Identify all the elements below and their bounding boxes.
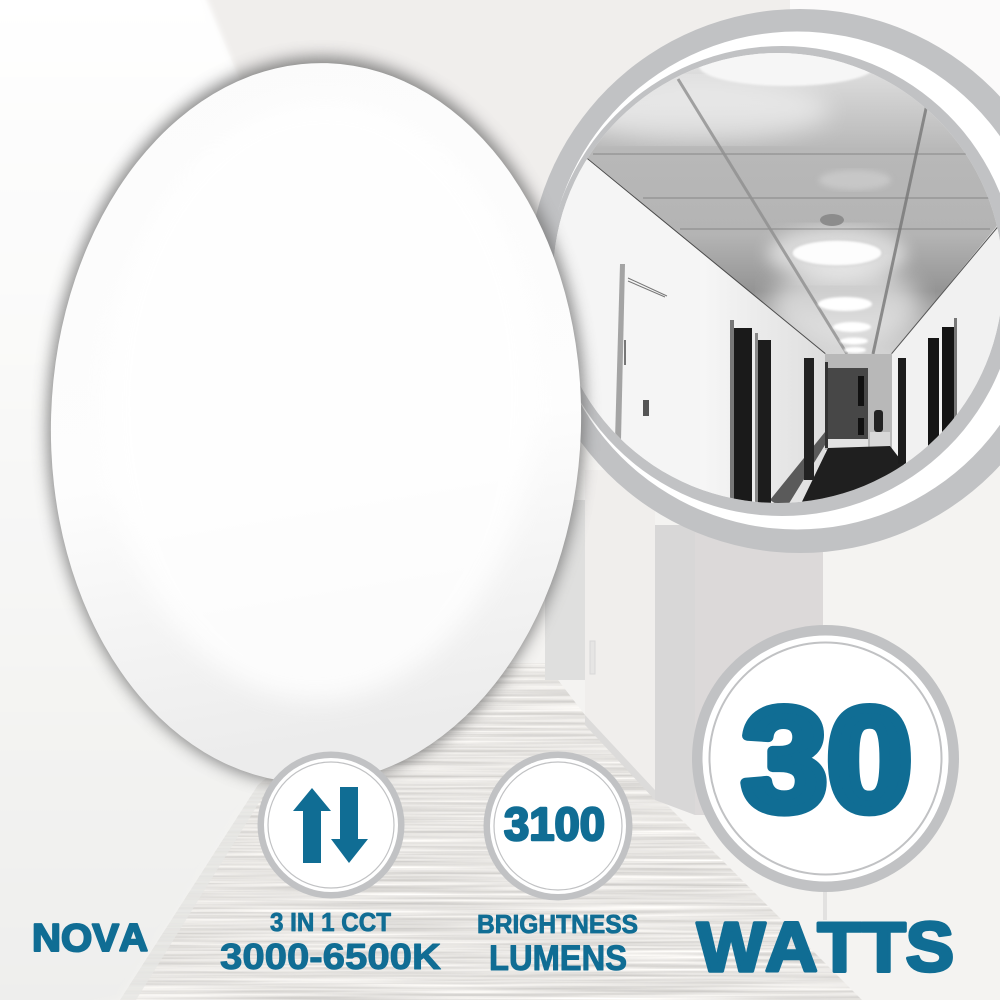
recessed wall — [695, 525, 823, 815]
label: watts: WATTS — [697, 908, 954, 986]
left skirting — [771, 432, 825, 503]
inset photo badge — [528, 9, 1000, 553]
lumens value: 3100 — [504, 798, 605, 850]
lamp highlight — [96, 94, 545, 707]
door skirting — [585, 715, 655, 800]
back door — [828, 368, 868, 439]
near door outline — [615, 264, 667, 440]
CCT badge — [258, 752, 404, 898]
left wall — [0, 0, 260, 1000]
door panel — [585, 470, 655, 790]
outer grey ring — [528, 9, 1000, 553]
label: model name: NOVA — [32, 917, 148, 960]
label: colour temperature: 3000-6500K — [220, 936, 441, 977]
fire extinguisher — [874, 410, 883, 432]
back wall — [825, 354, 892, 450]
label: colour temperature: 3 IN 1 CCT — [270, 907, 391, 937]
white ring — [548, 32, 1000, 530]
product: round ceiling lamp — [40, 55, 592, 791]
lumens badge — [484, 752, 632, 900]
watts badge — [692, 625, 959, 892]
upper right wall — [790, 0, 1000, 120]
right wall — [892, 228, 1000, 463]
corridor photo — [540, 40, 1000, 520]
door switch — [590, 641, 595, 674]
watts value: 30 — [742, 678, 912, 841]
photo floor — [802, 446, 904, 502]
wall lower shadow — [823, 880, 827, 920]
left wall — [586, 159, 825, 502]
ceiling grid lines — [587, 79, 1000, 354]
smoke detector — [820, 214, 844, 226]
ceiling lights — [699, 46, 882, 353]
label: brightness: LUMENS — [489, 939, 627, 978]
label: colour temperature — [220, 907, 441, 977]
label: brightness — [477, 909, 638, 978]
ceiling glow — [770, 263, 920, 347]
dark doors right — [898, 318, 957, 464]
floor — [137, 663, 862, 1000]
floor skirting left — [120, 785, 270, 1000]
thin grey ring — [547, 46, 1000, 516]
far wall section — [545, 500, 585, 680]
pillar — [655, 525, 695, 815]
product: lamp shadow — [37, 49, 595, 793]
photo ceiling — [588, 68, 997, 354]
label: brightness: BRIGHTNESS — [477, 909, 638, 939]
dark doors left — [730, 320, 828, 510]
icon: up and down arrows — [293, 787, 368, 863]
ceiling — [205, 0, 790, 300]
